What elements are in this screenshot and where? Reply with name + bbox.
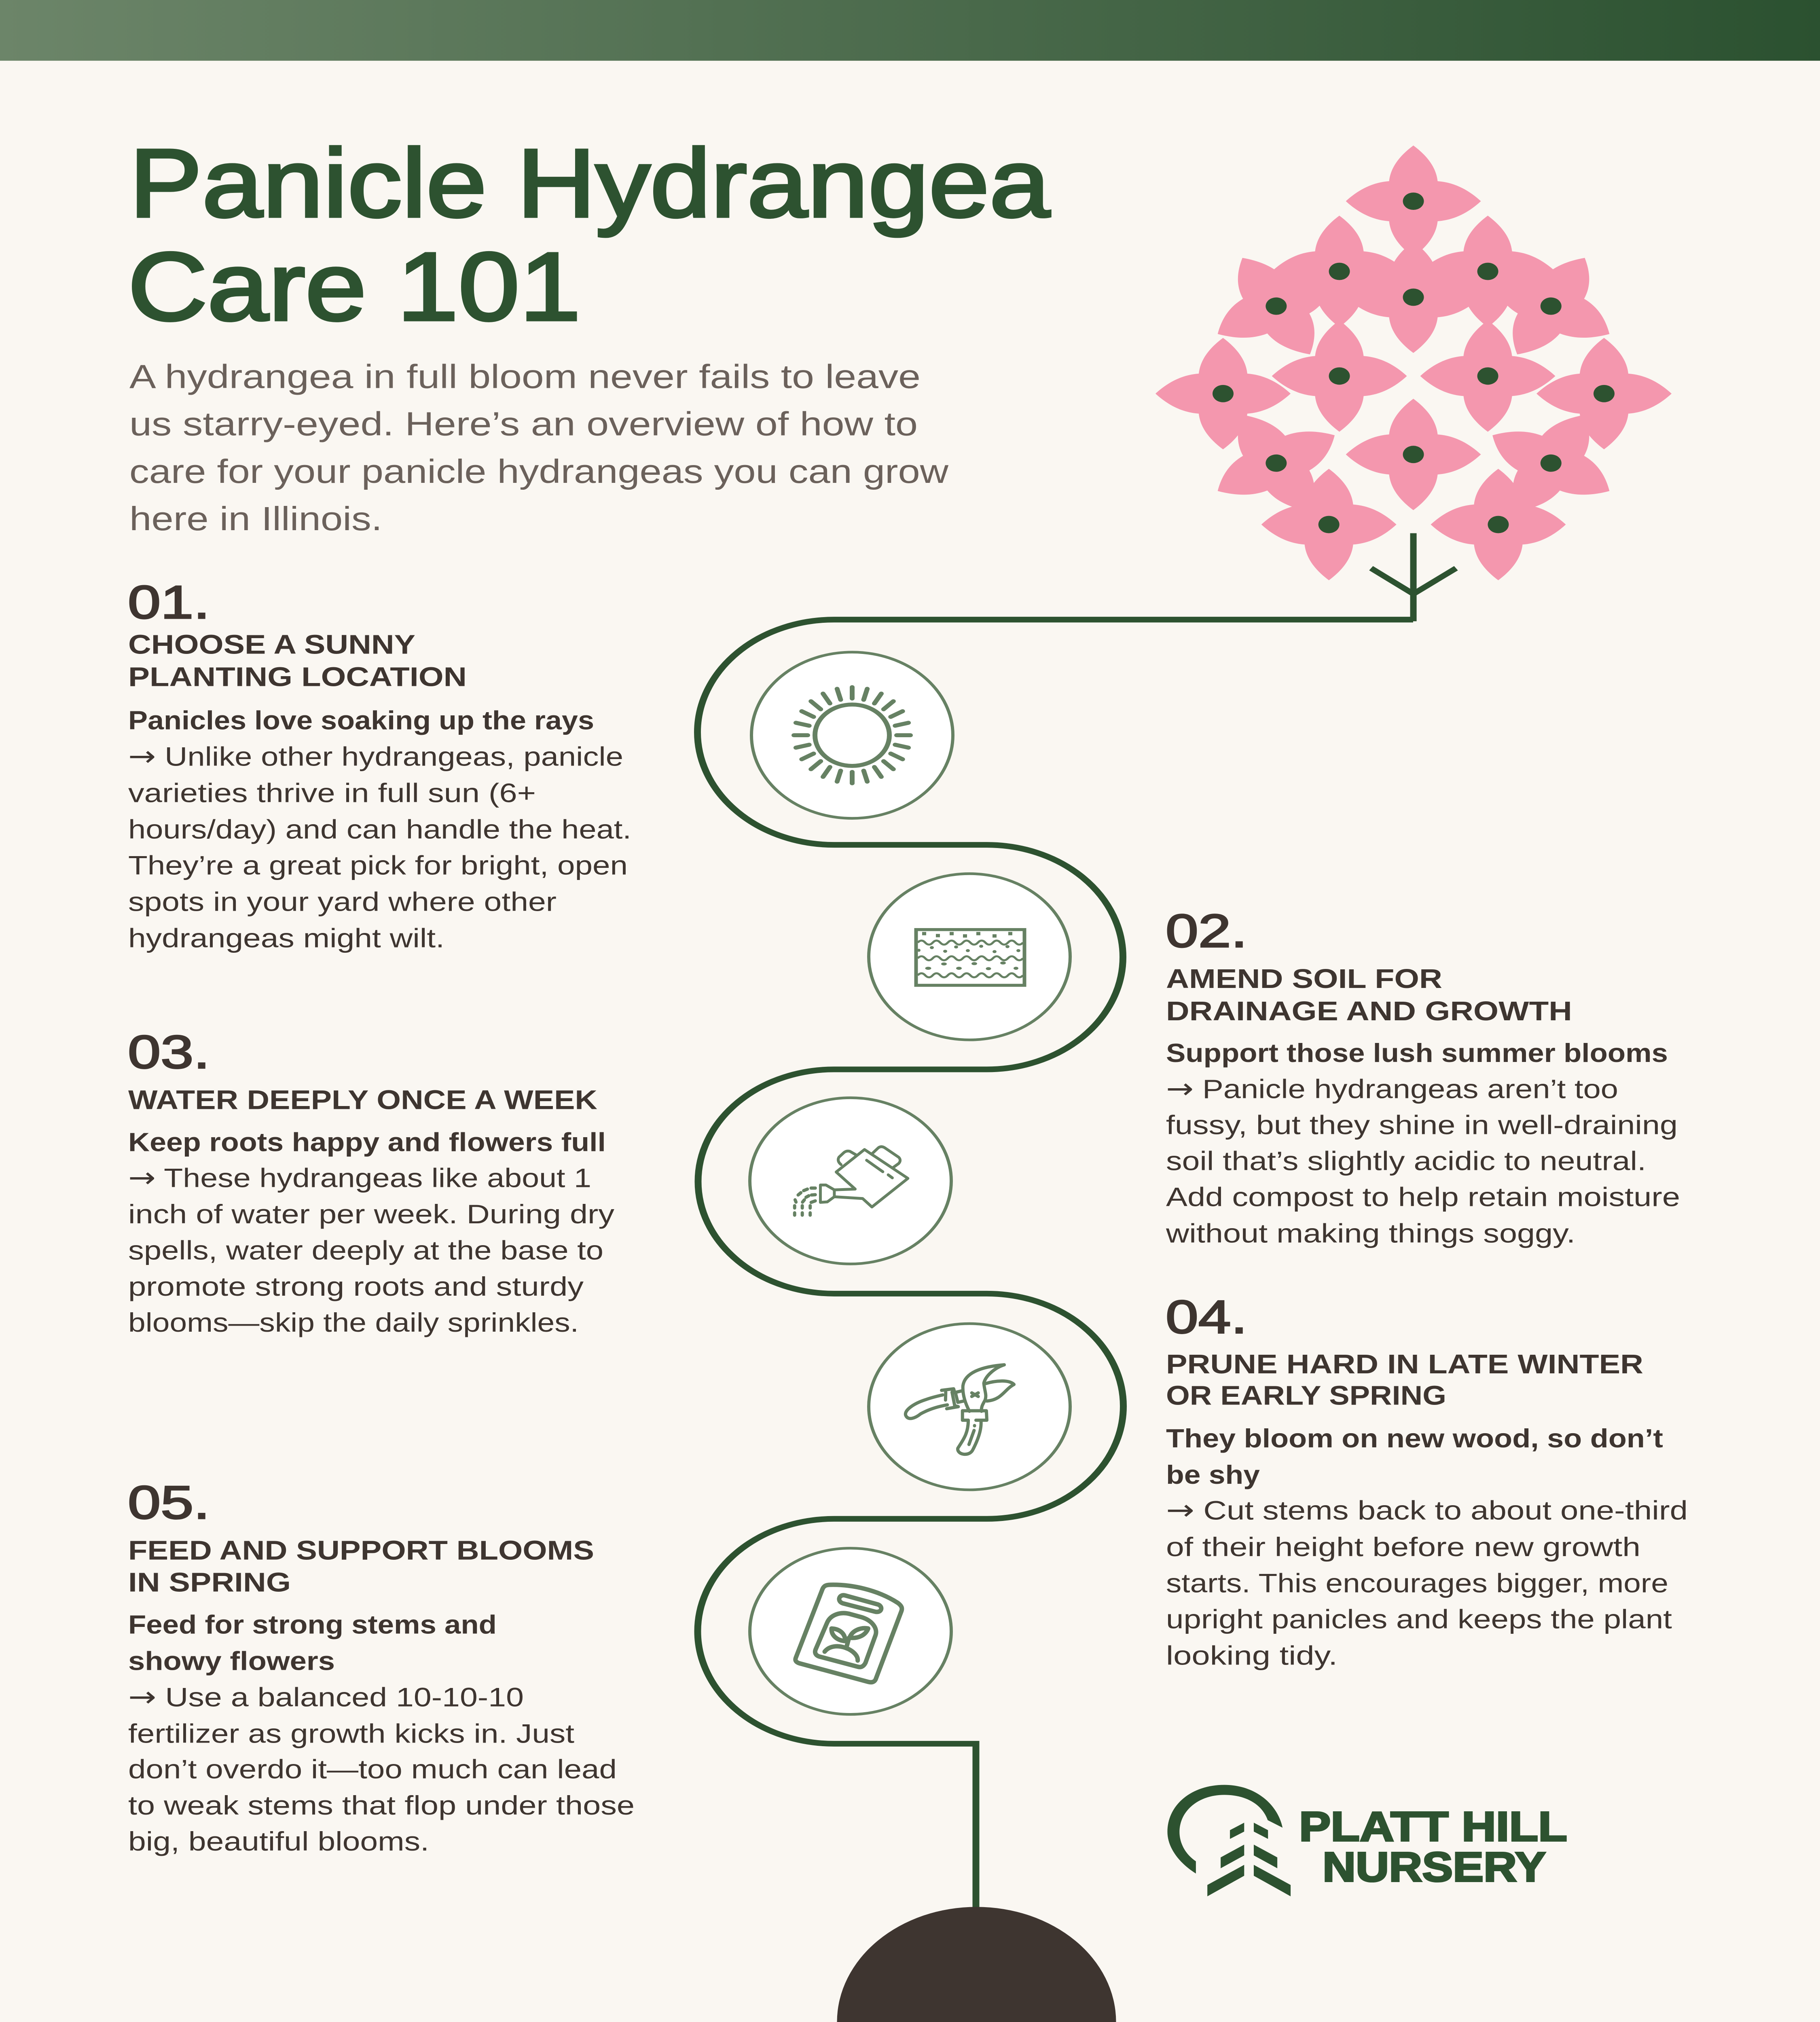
flower stem xyxy=(1371,533,1456,621)
soil mound xyxy=(837,1907,1116,2022)
panel: step 03 xyxy=(128,1026,614,1337)
subheading 05: Feed for strong stems and xyxy=(128,1610,497,1639)
body 04: → Cut stems back to about one-third xyxy=(1166,1494,1688,1527)
flower 5 xyxy=(1420,216,1555,327)
heading 05: IN SPRING xyxy=(128,1567,291,1597)
heading 01: PLANTING LOCATION xyxy=(128,662,467,692)
body 05: big, beautiful blooms. xyxy=(128,1827,429,1856)
body 03 xyxy=(128,1162,614,1337)
heading 02: AMEND SOIL FOR xyxy=(1166,964,1442,994)
body 04: of their height before new growth xyxy=(1166,1532,1640,1562)
flower 7 xyxy=(1272,320,1407,432)
panel: step 01 xyxy=(128,576,631,953)
subheading 03: Keep roots happy and flowers full xyxy=(128,1127,606,1157)
logo: Platt Hill Nursery xyxy=(1167,1785,1567,1896)
step number 02: 02. xyxy=(1166,905,1247,957)
icon: watering can xyxy=(750,1098,951,1264)
subheading 02: Support those lush summer blooms xyxy=(1166,1038,1668,1068)
step number 05: 05. xyxy=(128,1476,210,1529)
body 03: promote strong roots and sturdy xyxy=(128,1271,584,1301)
heading 01 xyxy=(128,629,467,692)
panel: step 02 xyxy=(1166,905,1680,1248)
body 03: → These hydrangeas like about 1 xyxy=(128,1162,591,1194)
intro paragraph: A hydrangea in full bloom never fails to leave xyxy=(129,358,921,396)
body 03: blooms—skip the daily sprinkles. xyxy=(128,1308,579,1337)
top gradient bar xyxy=(0,0,1820,61)
flower 11 xyxy=(1155,338,1291,449)
intro paragraph xyxy=(129,358,949,537)
logo wordmark: PLATT HILL xyxy=(1299,1803,1567,1850)
step number 03: 03. xyxy=(128,1026,210,1078)
body 04: looking tidy. xyxy=(1166,1641,1337,1671)
subheading 05 xyxy=(128,1610,497,1676)
body 02: Add compost to help retain moisture xyxy=(1166,1182,1680,1212)
body 05 xyxy=(128,1681,635,1856)
body 02: → Panicle hydrangeas aren’t too xyxy=(1166,1072,1618,1105)
heading 05 xyxy=(128,1535,594,1597)
flower 1 xyxy=(1346,146,1481,257)
flower 13 xyxy=(1346,399,1481,510)
flower 3 xyxy=(1459,230,1643,382)
subheading 04 xyxy=(1166,1424,1663,1490)
body 02: without making things soggy. xyxy=(1166,1218,1575,1248)
step number 04: 04. xyxy=(1166,1291,1247,1343)
body 01: They’re a great pick for bright, open xyxy=(128,850,628,880)
heading 02 xyxy=(1166,964,1572,1026)
body 04 xyxy=(1166,1494,1688,1671)
heading 04: PRUNE HARD IN LATE WINTER xyxy=(1166,1349,1643,1379)
flower 15 xyxy=(1431,469,1566,580)
panel: step 04 xyxy=(1166,1291,1688,1671)
heading 04: OR EARLY SPRING xyxy=(1166,1380,1446,1411)
flower 9 xyxy=(1184,387,1369,539)
heading 03: WATER DEEPLY ONCE A WEEK xyxy=(128,1085,597,1115)
logo wordmark xyxy=(1299,1803,1567,1890)
body 04: starts. This encourages bigger, more xyxy=(1166,1568,1668,1598)
icon: soil layers xyxy=(869,874,1070,1040)
intro paragraph: here in Illinois. xyxy=(129,500,382,537)
body 01: → Unlike other hydrangeas, panicle xyxy=(128,740,623,773)
heading 04 xyxy=(1166,1349,1643,1411)
body 03: spells, water deeply at the base to xyxy=(128,1235,603,1265)
title xyxy=(128,129,1051,341)
body 01: varieties thrive in full sun (6+ xyxy=(128,778,536,808)
intro paragraph: care for your panicle hydrangeas you can grow xyxy=(129,453,949,490)
body 01: spots in your yard where other xyxy=(128,887,557,917)
icon: pruning shears xyxy=(869,1324,1070,1490)
flower 14 xyxy=(1261,469,1397,580)
panel: step 05 xyxy=(128,1476,635,1856)
body 02 xyxy=(1166,1072,1680,1248)
body 02: fussy, but they shine in well-draining xyxy=(1166,1110,1678,1140)
subheading 01: Panicles love soaking up the rays xyxy=(128,706,594,735)
body 05: don’t overdo it—too much can lead xyxy=(128,1754,617,1784)
body 04: upright panicles and keeps the plant xyxy=(1166,1604,1672,1634)
icon: seed packet xyxy=(750,1548,951,1714)
illustration: hydrangea bloom xyxy=(1155,146,1672,621)
title: Panicle Hydrangea xyxy=(129,129,1051,238)
body 05: to weak stems that flop under those xyxy=(128,1790,635,1820)
flower 12 xyxy=(1536,338,1672,449)
winding stem path xyxy=(697,620,1413,1908)
body 01: hours/day) and can handle the heat. xyxy=(128,814,631,844)
intro paragraph: us starry-eyed. Here’s an overview of how to xyxy=(129,406,918,443)
flower 10 xyxy=(1459,387,1643,539)
subheading 04: be shy xyxy=(1166,1460,1260,1490)
logo mark xyxy=(1167,1785,1291,1896)
flower 8 xyxy=(1420,320,1555,432)
heading 05: FEED AND SUPPORT BLOOMS xyxy=(128,1535,594,1565)
step number 01: 01. xyxy=(128,576,210,628)
body 01 xyxy=(128,740,631,953)
subheading 04: They bloom on new wood, so don’t xyxy=(1166,1424,1663,1453)
body 05: → Use a balanced 10-10-10 xyxy=(128,1681,524,1713)
flower 6 xyxy=(1346,241,1481,353)
subheading 05: showy flowers xyxy=(128,1646,335,1676)
body 03: inch of water per week. During dry xyxy=(128,1199,614,1229)
logo wordmark: NURSERY xyxy=(1323,1844,1546,1890)
icon: sun xyxy=(751,652,953,819)
body 02: soil that’s slightly acidic to neutral. xyxy=(1166,1146,1646,1176)
flower 2 xyxy=(1184,230,1369,382)
title: Care 101 xyxy=(128,233,581,341)
body 05: fertilizer as growth kicks in. Just xyxy=(128,1719,574,1749)
body 01: hydrangeas might wilt. xyxy=(128,923,444,953)
flower 4 xyxy=(1272,216,1407,327)
heading 02: DRAINAGE AND GROWTH xyxy=(1166,996,1572,1026)
heading 01: CHOOSE A SUNNY xyxy=(128,629,415,660)
